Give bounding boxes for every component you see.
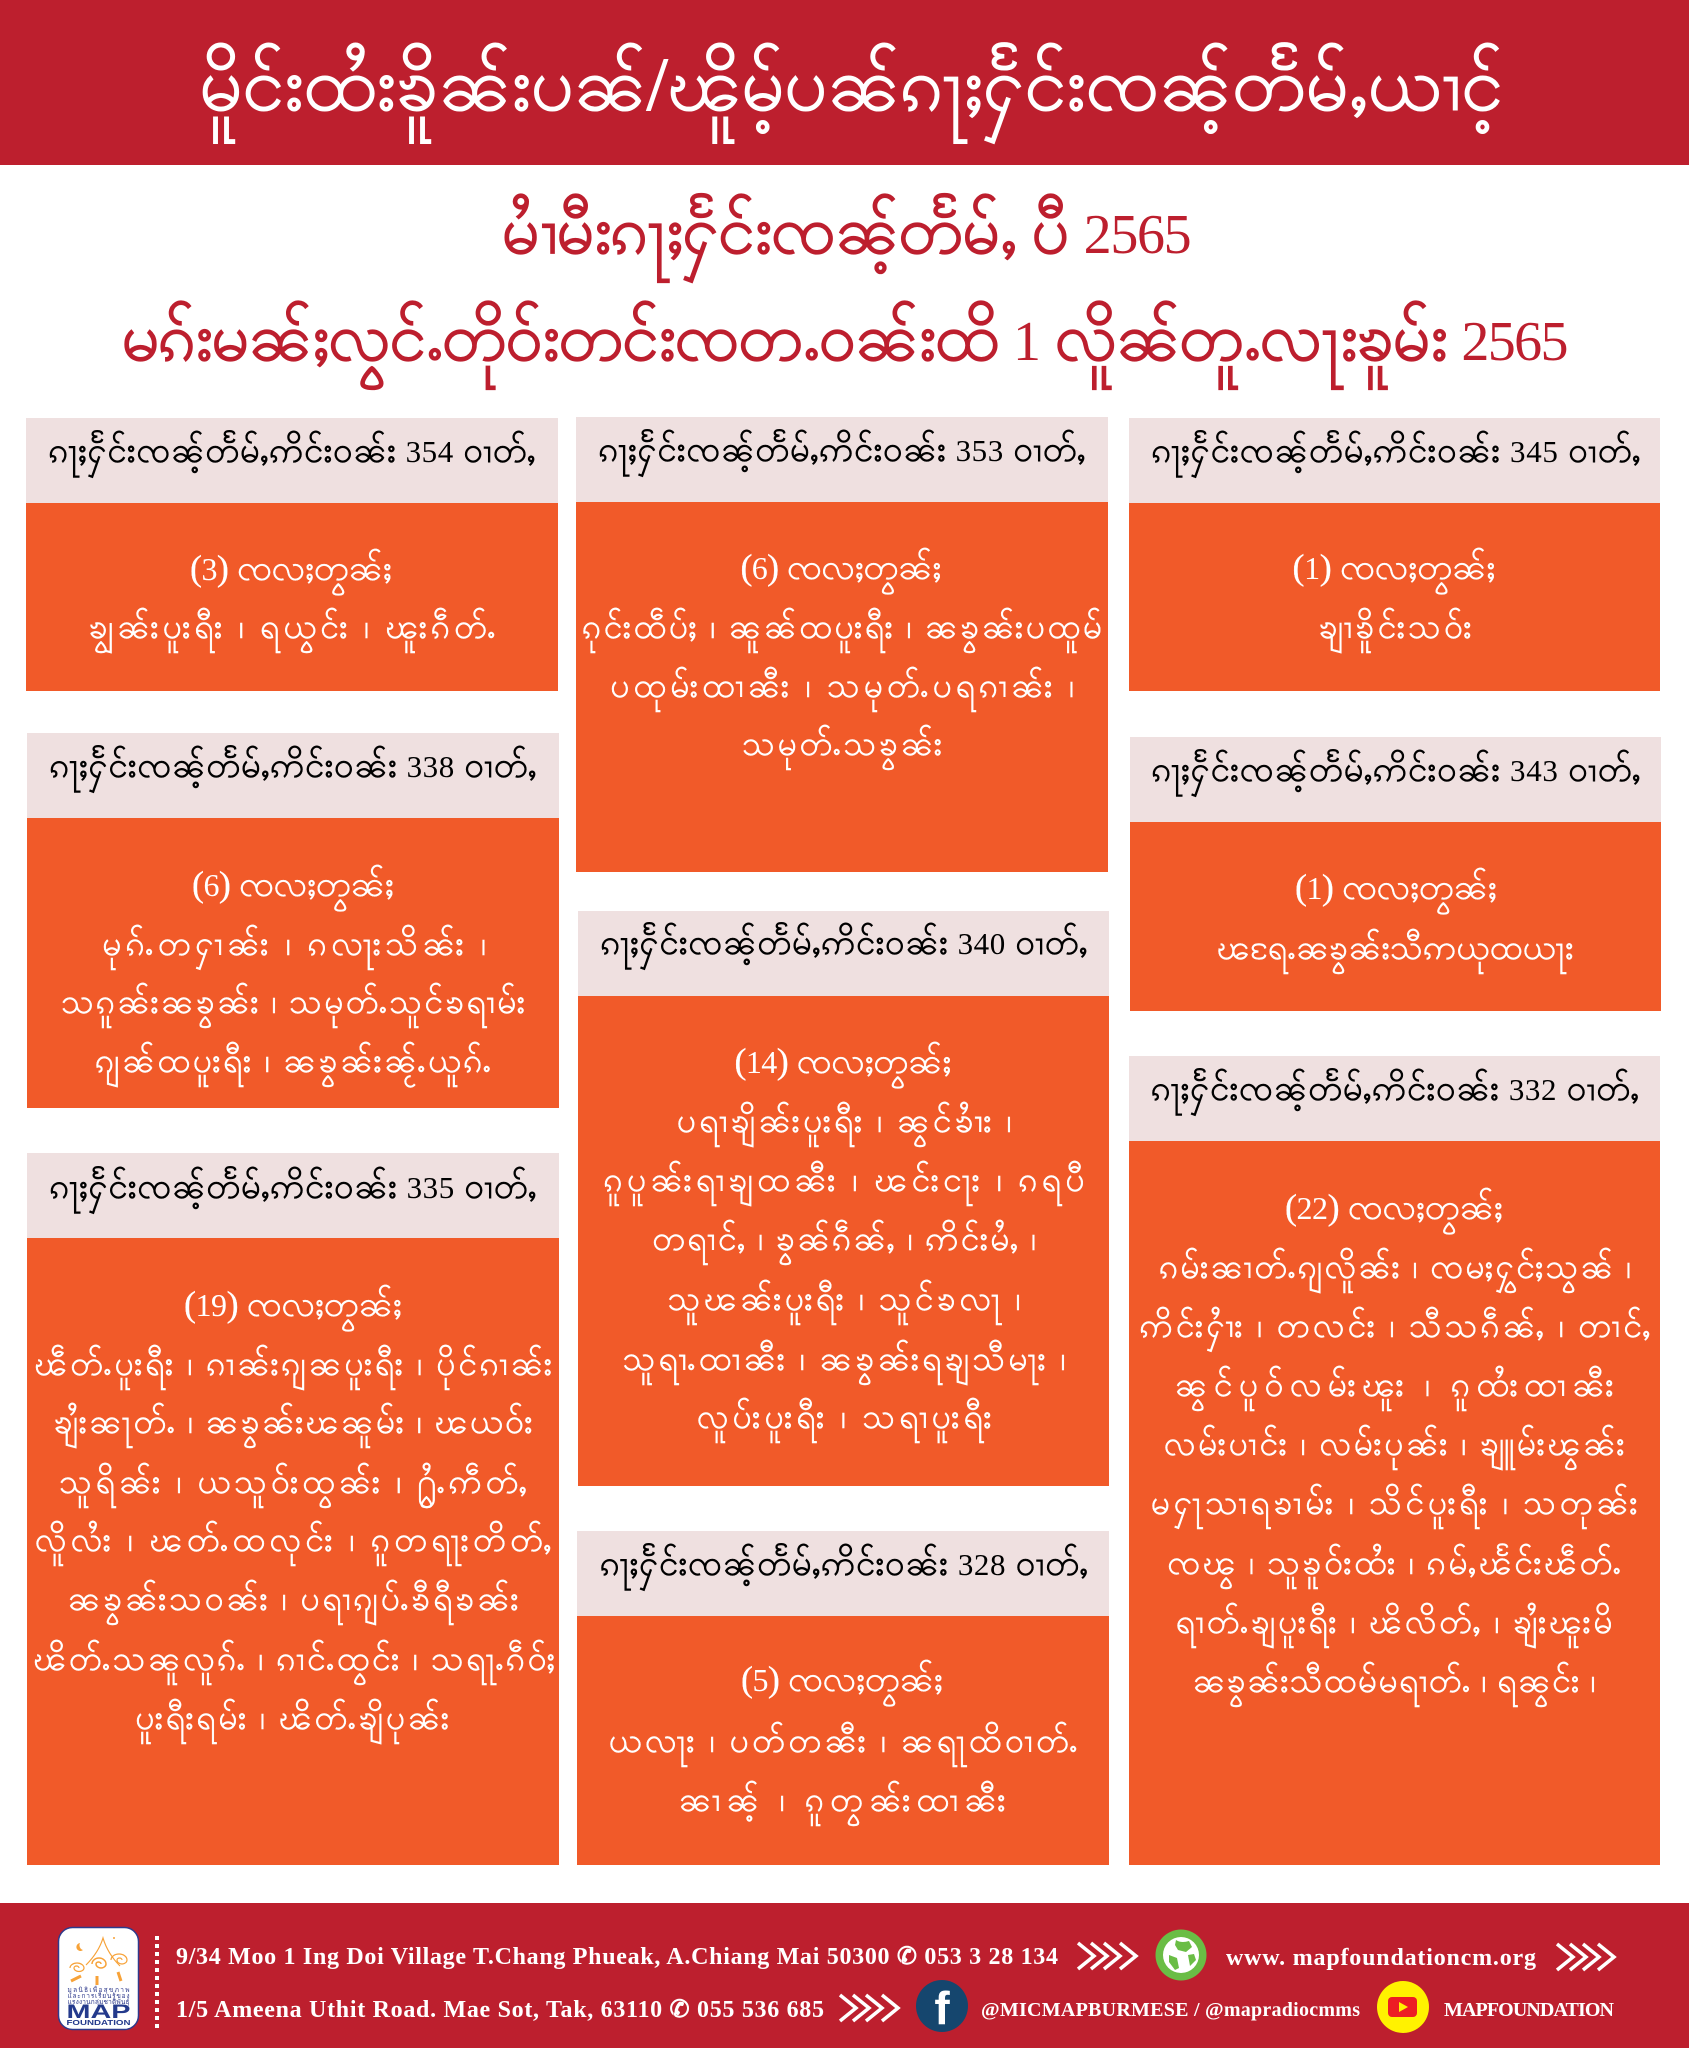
provinces list: ၶျွၼ်းပူးရီး ၊ ရယွင်း ၊ ၽူးၵဵတ်ႉ bbox=[88, 608, 496, 654]
provinces list: ယလႃး ၊ ပတ်တၼီး ၊ ၼရႃထိဝၢတ်ႉ bbox=[608, 1722, 1078, 1767]
province name: ၶျၢၶိူင်းသဝ်း bbox=[1318, 608, 1472, 653]
panel: 353 baht bbox=[576, 417, 1108, 872]
panel: 345 baht bbox=[1129, 418, 1660, 691]
provinces list: ပရၢၶျိၼ်းပူးရီး ၊ ၼွင်ၶၢႆး ၊ bbox=[676, 1102, 1012, 1147]
website: www. mapfoundationcm.org bbox=[1226, 1945, 1536, 1971]
heading: 354: ၵႃႈႁႅင်းၸၼ့်တႅမ်ႇဢိင်းဝၼ်း 354 ဝၢတ်ႇ bbox=[48, 430, 536, 479]
provinces list: သမုတ်ႉသၶွၼ်း bbox=[742, 725, 942, 770]
provinces list: လူပ်းပူးရီး ၊ သရၢပူးရီး bbox=[696, 1398, 992, 1443]
icon: globe bbox=[1156, 1930, 1206, 1980]
provinces list bbox=[61, 925, 525, 1087]
title: မိူင်းထႆးၶိူၼ်းပၼ်/ၽိူမ့်ပၼ်ၵႃႈႁႅင်းၸၼ့်တႅမ်ႇယၢင့် bbox=[199, 43, 1503, 144]
provinces list: ပထုမ်းထၢၼီး ၊ သမုတ်ႉပရၵၢၼ်း ၊ bbox=[610, 667, 1074, 712]
provinces list: ၵူပူၼ်းရၢၶျထၼီး ၊ ၽင်းငႃး ၊ ၵရပီ bbox=[604, 1161, 1084, 1206]
province count: 6: (6) ၸလႈတွၼ်ႈ bbox=[740, 547, 942, 595]
logo: MAP bbox=[66, 2002, 131, 2023]
provinces list: ဢိင်းႁၢႆး ၊ တလင်း ၊ သီသၵဵၼ်ႇ ၊ တၢင်ႇ bbox=[1140, 1307, 1650, 1352]
province count: 6: (6) ၸလႈတွၼ်ႈ bbox=[192, 864, 394, 912]
province count: 22: (22) ၸလႈတွၼ်ႈ bbox=[1285, 1187, 1503, 1235]
provinces list: လမ်းပၢင်း ၊ လမ်းပုၼ်း ၊ ၶျူမ်းၽွၼ်း bbox=[1164, 1425, 1624, 1470]
arrow: chevrons bbox=[840, 1995, 898, 2021]
title banner bbox=[0, 0, 1689, 165]
panel: 340 baht bbox=[578, 911, 1109, 1486]
provinces list: သၵူၼ်းၼၶွၼ်း ၊ သမုတ်ႉသူင်ၶရၢမ်း bbox=[61, 983, 525, 1028]
youtube channel: MAPFOUNDATION bbox=[1444, 1999, 1615, 2021]
panel: 338 baht bbox=[27, 733, 559, 1108]
panel: 328 baht bbox=[577, 1531, 1109, 1865]
province name: ၽရႄႉၼၶွၼ်းသီဢယုထယႃး bbox=[1216, 929, 1574, 974]
provinces list: မုၵ်ႉတႁၢၼ်း ၊ ၵလႃးသိၼ်း ၊ bbox=[102, 925, 486, 970]
provinces list: ၵျၼ်ထပူးရီး ၊ ၼၶွၼ်းၼႂ်ႉယူၵ်ႉ bbox=[95, 1042, 491, 1087]
provinces list: ၼၶွၼ်းသီထမ်မရၢတ်ႉ ၊ ရၼွင်း ၊ bbox=[1192, 1662, 1596, 1707]
icon: youtube bbox=[1377, 1981, 1429, 2033]
subtitle: year: မၢႆမီးၵႃႈႁႅင်းၸၼ့်တႅမ်ႇ ပီ 2565 bbox=[502, 194, 1192, 283]
logo Thai text: และการเรียนรู้ของ bbox=[68, 1992, 130, 2000]
provinces list: မႁႃသၢရၶၢမ်း ၊ သိင်ပူးရီး ၊ သတုၼ်း bbox=[1150, 1484, 1638, 1529]
icon: facebook: f bbox=[934, 1982, 950, 2034]
provinces list bbox=[1140, 1248, 1650, 1707]
heading: 340: ၵႃႈႁႅင်းၸၼ့်တႅမ်ႇဢိင်းဝၼ်း 340 ဝၢတ်ႇ bbox=[600, 922, 1088, 971]
heading: 345: ၵႃႈႁႅင်းၸၼ့်တႅမ်ႇဢိင်းဝၼ်း 345 ဝၢတ်ႇ bbox=[1152, 430, 1640, 479]
heading: 335: ၵႃႈႁႅင်းၸၼ့်တႅမ်ႇဢိင်းဝၼ်း 335 ဝၢတ်ႇ bbox=[50, 1166, 536, 1215]
provinces list: ၵမ်းၼၢတ်ႉၵျလိူၼ်း ၊ ၸမႈႁွင်ႈသွၼ် ၊ bbox=[1159, 1248, 1631, 1293]
provinces list: တရၢင်ႇ ၊ ၶွၼ်ၵဵၼ်ႇ ၊ ဢိင်းမႆႇ ၊ bbox=[652, 1220, 1036, 1265]
provinces list: ၽဵတ်ႉပူးရီး ၊ ၵၢၼ်းၵျၼပူးရီး ၊ ပိုင်ၵၢၼ်း bbox=[34, 1345, 552, 1390]
province count: 14: (14) ၸလႈတွၼ်ႈ bbox=[734, 1041, 952, 1089]
provinces list bbox=[604, 1102, 1084, 1443]
provinces list: ရၢတ်ႉၶျပူးရီး ၊ ၽိလိတ်ႇ ၊ ၶျႆးၽူးမိ bbox=[1176, 1603, 1612, 1648]
logo Thai text bbox=[68, 1985, 130, 2006]
province count: 19: (19) ၸလႈတွၼ်ႈ bbox=[184, 1284, 402, 1332]
heading: 343: ၵႃႈႁႅင်းၸၼ့်တႅမ်ႇဢိင်းဝၼ်း 343 ဝၢတ်ႇ bbox=[1152, 749, 1640, 798]
logo bbox=[58, 1928, 138, 2030]
provinces list: ၶျႆးၼႃတ်ႉ ၊ ၼၶွၼ်းၽၼူမ်း ၊ ၽယဝ်း bbox=[54, 1403, 532, 1448]
icon: facebook bbox=[916, 1980, 968, 2034]
footer bbox=[0, 1903, 1689, 2048]
provinces list bbox=[33, 1345, 555, 1744]
provinces list: ၽိတ်ႉသၼူလူၵ်ႉ ၊ ၵၢင်ႉထွင်း ၊ သရႃႉၵဵဝ်ႈ bbox=[33, 1640, 555, 1685]
logo: FOUNDATION bbox=[66, 2018, 130, 2027]
provinces list: ၵုင်းထဵပ်ႈ ၊ ၼူၼ်ထပူးရီး ၊ ၼၶွၼ်းပထူမ် bbox=[582, 608, 1102, 653]
social handles: @MICMAPBURMESE / @mapradiocmms bbox=[981, 1999, 1360, 2021]
subtitle: effective date: မၵ်းမၼ်ႈလွင်ႉတိုဝ်းတင်းၸတႉဝၼ်းထိ 1 လိူၼ်တူႉလႃးၶူမ်း 2565 bbox=[122, 301, 1568, 389]
provinces list: ၼွင်ပူဝ်လမ်းၽူး ၊ ၵူထႆးထၢၼီး bbox=[1174, 1366, 1614, 1411]
heading: 353: ၵႃႈႁႅင်းၸၼ့်တႅမ်ႇဢိင်းဝၼ်း 353 ဝၢတ်ႇ bbox=[598, 429, 1086, 478]
provinces list: သူရၢႉထၢၼီး ၊ ၼၶွၼ်းရၶျသီမႃး ၊ bbox=[622, 1340, 1066, 1385]
panel: 332 baht bbox=[1129, 1056, 1660, 1865]
heading: 332: ၵႃႈႁႅင်းၸၼ့်တႅမ်ႇဢိင်းဝၼ်း 332 ဝၢတ်ႇ bbox=[1151, 1068, 1639, 1117]
panel: 335 baht bbox=[27, 1153, 559, 1865]
provinces list: သူရိၼ်း ၊ ယသူဝ်းထွၼ်း ၊ ႐ွႆႉဢဵတ်ႇ bbox=[59, 1463, 527, 1508]
arrow: chevrons bbox=[1557, 1944, 1614, 1970]
arrow: chevrons bbox=[1078, 1943, 1136, 1969]
provinces list bbox=[582, 608, 1102, 770]
province count: 1: (1) ၸလႈတွၼ်ႈ bbox=[1295, 867, 1497, 915]
logo Thai text: แรงงานกลุ่มชาติพันธุ์ bbox=[68, 1998, 130, 2006]
province count: 1: (1) ၸလႈတွၼ်ႈ bbox=[1292, 547, 1496, 595]
panel: 354 baht bbox=[26, 418, 558, 691]
province count: 3: (3) ၸလႈတွၼ်ႈ bbox=[190, 548, 392, 596]
provinces list: သူၽၼ်းပူးရီး ၊ သူင်ၶလႃ ၊ bbox=[668, 1280, 1020, 1325]
provinces list: ၸၽွ ၊ သူၶူဝ်းထႆး ၊ ၵမ်ႇၽႅင်းၽဵတ်ႉ bbox=[1167, 1544, 1621, 1589]
provinces list bbox=[608, 1722, 1078, 1826]
provinces list: ၼၶွၼ်းသဝၼ်း ၊ ပရၢၵျပ်ႉၶီရီၶၼ်း bbox=[68, 1580, 518, 1625]
province count: 5: (5) ၸလႈတွၼ်ႈ bbox=[741, 1659, 943, 1707]
provinces list: လိူလႆး ၊ ၽတ်ႉထလုင်း ၊ ၵူတရႃးတိတ်ႇ bbox=[34, 1521, 552, 1566]
logo Thai text: มูลนิธิเพื่อสุขภาพ bbox=[68, 1985, 130, 1994]
provinces list: ၼၢၼ့် ၊ ၵူတွၼ်းထၢၼီး bbox=[678, 1781, 1006, 1826]
panel: 343 baht bbox=[1130, 737, 1661, 1011]
provinces list: ပူးရီးရမ်း ၊ ၽိတ်ႉၶျိပုၼ်း bbox=[135, 1699, 449, 1744]
address: Chiang Mai: 9/34 Moo 1 Ing Doi Village T.Chang Phueak, A.Chiang Mai 50300 ✆ 053 3 28 134 bbox=[176, 1944, 1058, 1970]
address: Mae Sot: 1/5 Ameena Uthit Road. Mae Sot, Tak, 63110 ✆ 055 536 685 bbox=[176, 1997, 824, 2023]
heading: 338: ၵႃႈႁႅင်းၸၼ့်တႅမ်ႇဢိင်းဝၼ်း 338 ဝၢတ်ႇ bbox=[50, 745, 536, 794]
heading: 328: ၵႃႈႁႅင်းၸၼ့်တႅမ်ႇဢိင်းဝၼ်း 328 ဝၢတ်ႇ bbox=[600, 1543, 1088, 1592]
